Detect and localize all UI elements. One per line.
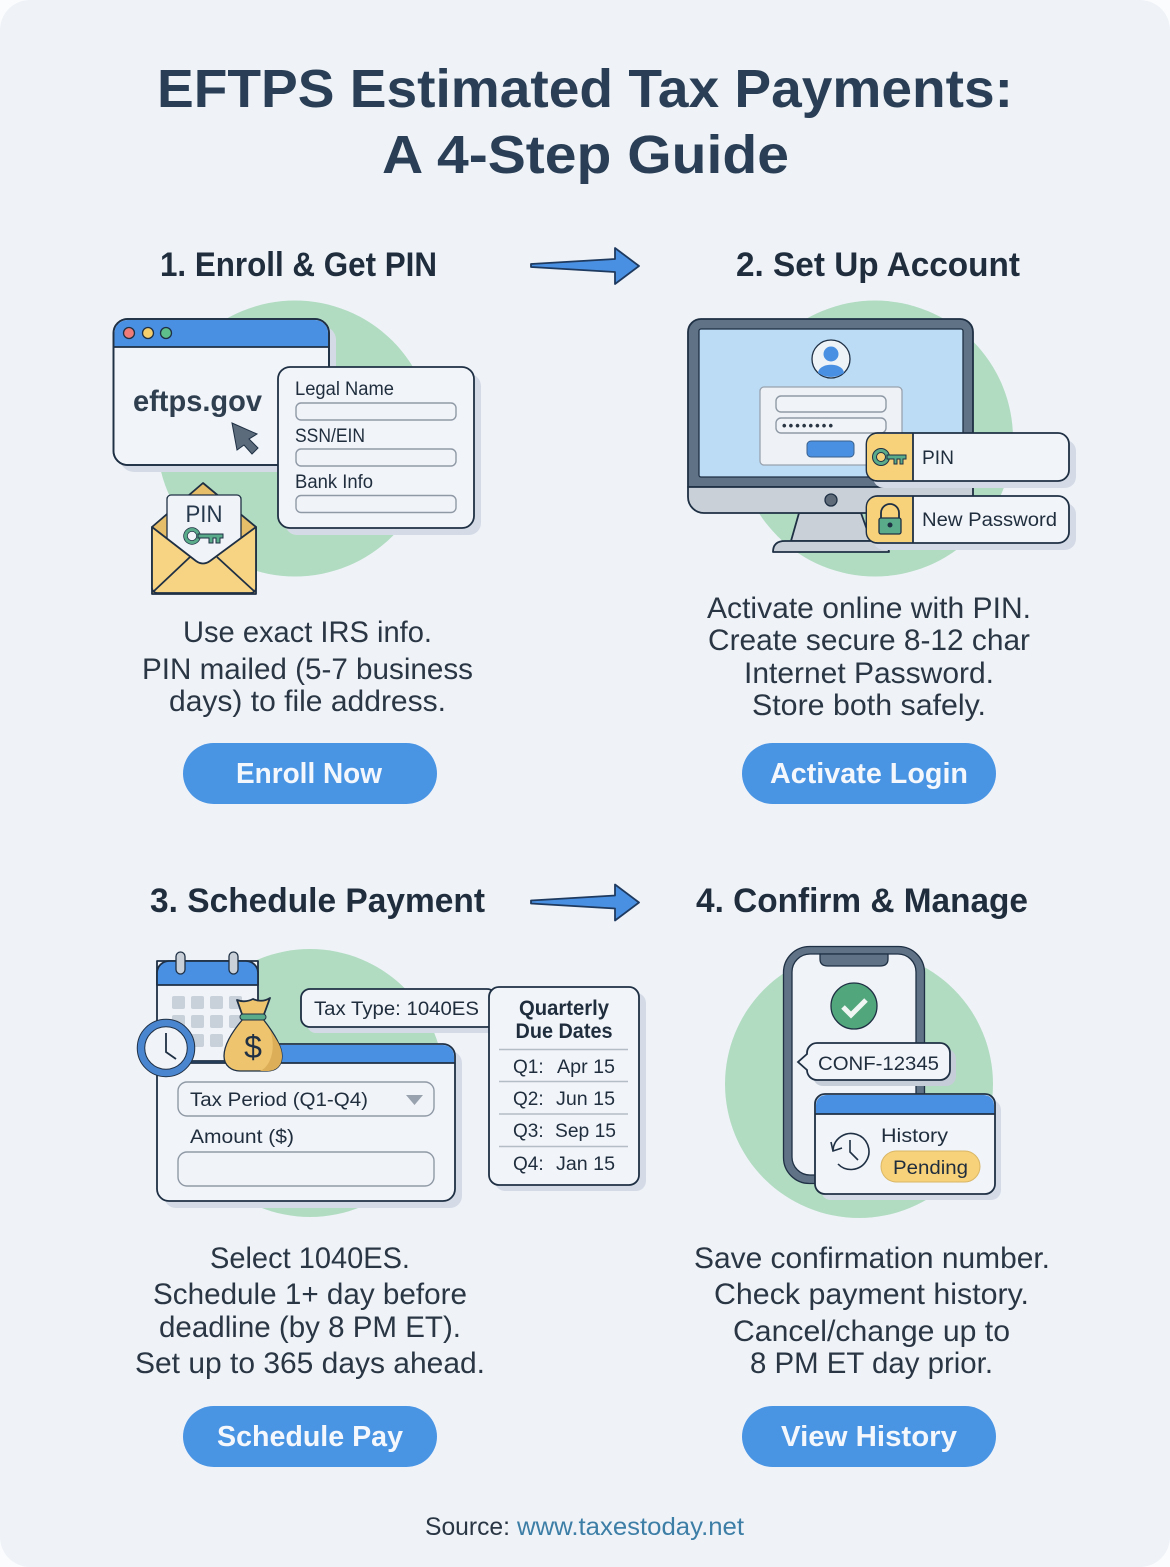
panel: step 2 account [688,246,1076,804]
source line [425,1513,744,1541]
button: enroll now: Enroll Now [236,758,382,790]
form card [278,367,481,535]
confirmation bubble: CONF-12345 [818,1054,939,1075]
description: step 4 [694,1242,1050,1380]
phone [784,946,924,1184]
icon: history clock [831,1133,869,1169]
payment form window [157,1044,462,1208]
icon: envelope with PIN: PIN [186,501,222,528]
title [157,59,1013,185]
description: step 3: Schedule 1+ day before [153,1278,467,1311]
icon: money bag [224,998,282,1071]
browser window [114,319,336,472]
button: enroll now [183,743,437,804]
quarterly due dates panel: Jun 15 [556,1089,615,1110]
quarterly due dates panel: Quarterly [519,997,609,1020]
tag: PIN: PIN [922,448,954,469]
description: step 3: Select 1040ES. [210,1242,410,1275]
quarterly due dates panel: Q1: [513,1057,544,1078]
arrow: step 1 to 2 [531,248,639,284]
icon: cursor [232,423,258,454]
form card: Bank Info [295,472,373,493]
description: step 2: Create secure 8-12 char [708,624,1030,657]
history card: History [881,1126,949,1147]
status pill: pending: Pending [893,1158,968,1179]
heading: step 4: 4. Confirm & Manage [696,882,1028,920]
icon: envelope with PIN [152,483,256,594]
status pill: pending [881,1151,980,1182]
quarterly due dates panel: Apr 15 [557,1057,615,1078]
icon: clock [141,1023,191,1073]
form card: Legal Name [295,379,394,400]
button: activate login [742,743,996,804]
description: step 2: Internet Password. [744,657,994,690]
description: step 3 [135,1242,485,1380]
quarterly due dates panel [489,987,646,1191]
heading: step 1: 1. Enroll & Get PIN [160,246,437,284]
source line: www.taxestoday.net [516,1513,744,1541]
description: step 1: days) to file address. [169,685,446,718]
quarterly due dates panel: Q2: [513,1089,544,1110]
title: EFTPS Estimated Tax Payments: [157,59,1013,119]
illustration: set up [688,300,1076,576]
description: step 1 [142,616,473,718]
form card: SSN/EIN [295,426,365,447]
button: schedule pay: Schedule Pay [217,1421,403,1453]
description: step 3: Set up to 365 days ahead. [135,1347,485,1380]
panel: step 1 enroll [114,246,481,804]
tag: new password [866,496,1076,550]
payment form window: Tax Period (Q1-Q4) [190,1090,368,1111]
icon: check circle [831,983,877,1029]
button: activate login: Activate Login [770,758,968,790]
description: step 1: PIN mailed (5-7 business [142,653,473,686]
tag: PIN [866,433,1076,488]
quarterly due dates panel: Due Dates [516,1020,612,1043]
description: step 2: Activate online with PIN. [707,592,1031,625]
illustration: schedule [141,949,646,1217]
heading: step 2: 2. Set Up Account [736,246,1020,284]
quarterly due dates panel: Sep 15 [555,1121,616,1142]
description: step 1: Use exact IRS info. [183,616,432,649]
heading: step 3: 3. Schedule Payment [150,882,485,920]
source line: Source: [425,1513,510,1541]
description: step 3: deadline (by 8 PM ET). [159,1311,461,1344]
browser window: eftps.gov [133,385,262,418]
confirmation bubble [798,1043,956,1086]
arrow: step 3 to 4 [531,884,639,920]
illustration: confirm [725,946,1001,1218]
history card [815,1094,1001,1200]
monitor [688,319,973,552]
payment form window: Amount ($) [190,1127,294,1148]
button: view history: View History [781,1421,957,1453]
monitor: •••••••• [782,418,833,433]
illustration: enroll [114,300,481,594]
tag: new password: New Password [922,510,1057,531]
quarterly due dates panel: Q4: [513,1154,544,1175]
tax type pill: Tax Type: 1040ES [314,999,479,1020]
panel: step 4 confirm [694,882,1050,1467]
description: step 2: Store both safely. [752,689,986,722]
button: schedule pay [183,1406,437,1467]
description: step 2 [707,592,1031,722]
quarterly due dates panel: Jan 15 [556,1154,615,1175]
icon: money bag: $ [244,1029,262,1065]
description: step 4: Check payment history. [714,1278,1029,1311]
tax type pill [301,989,497,1033]
panel: step 3 schedule [135,882,646,1467]
button: view history [742,1406,996,1467]
description: step 4: Cancel/change up to [733,1315,1010,1348]
icon: calendar [157,952,258,1061]
title: A 4-Step Guide [382,125,789,185]
description: step 4: Save confirmation number. [694,1242,1050,1275]
description: step 4: 8 PM ET day prior. [750,1347,993,1380]
quarterly due dates panel: Q3: [513,1121,544,1142]
